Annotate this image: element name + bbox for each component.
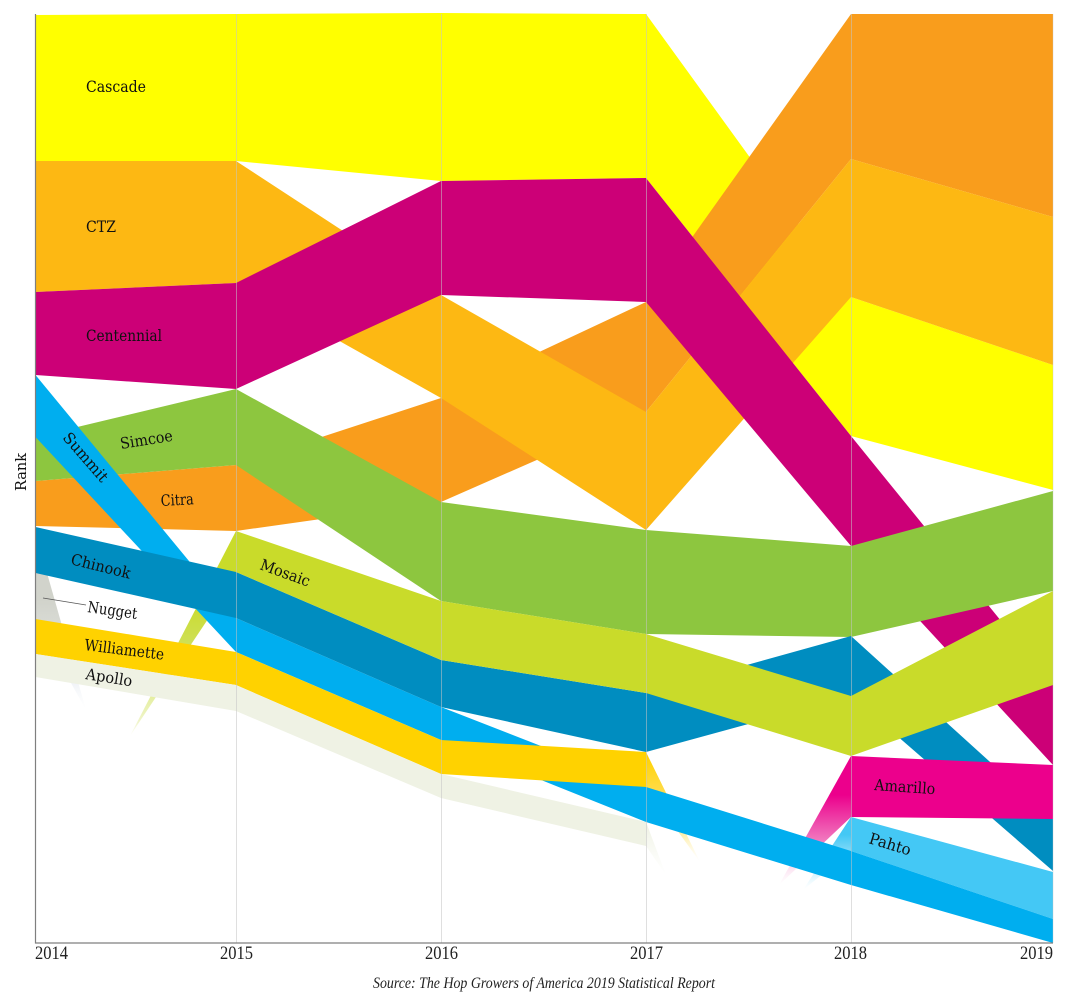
band: Amarillo entry fade bbox=[779, 756, 851, 885]
year labels: 2014 bbox=[35, 944, 68, 964]
band: Apollo bbox=[36, 654, 646, 846]
band: Centennial bbox=[36, 178, 1053, 765]
band: Citra bbox=[36, 14, 1053, 531]
year labels: 2019 bbox=[1020, 944, 1053, 964]
band: Williamette exit fade bbox=[646, 752, 700, 862]
year labels: 2017 bbox=[630, 944, 663, 964]
label: Pahto: Pahto bbox=[867, 830, 913, 859]
band: Mosaic bbox=[236, 531, 1053, 756]
band: Simcoe bbox=[36, 389, 1053, 637]
label: Chinook: Chinook bbox=[69, 550, 133, 583]
year labels: 2016 bbox=[425, 944, 458, 964]
band: Summit bbox=[36, 375, 1053, 943]
band: Williamette bbox=[36, 619, 646, 787]
label: Centennial: Centennial bbox=[86, 327, 162, 345]
band: Chinook bbox=[36, 527, 1053, 871]
label: Apollo: Apollo bbox=[83, 665, 134, 690]
axis title: Rank: Rank bbox=[12, 452, 30, 491]
band: Pahto bbox=[851, 817, 1053, 919]
label: Nugget: Nugget bbox=[86, 598, 139, 623]
source note: Source: The Hop Growers of America 2019 Statistical Report bbox=[373, 975, 715, 992]
band: CTZ bbox=[36, 159, 1053, 530]
label: Mosaic: Mosaic bbox=[258, 556, 313, 591]
label: Amarillo: Amarillo bbox=[873, 776, 936, 798]
band: Pahto entry fade bbox=[803, 817, 851, 890]
label: Summit: Summit bbox=[59, 429, 112, 486]
label: Williamette: Williamette bbox=[84, 636, 165, 664]
band: Mosaic entry fade bbox=[130, 531, 236, 736]
label: Cascade: Cascade bbox=[86, 78, 146, 96]
band: Nugget fade bbox=[36, 573, 86, 710]
band: Cascade bbox=[36, 13, 1053, 490]
label: Citra: Citra bbox=[160, 490, 194, 510]
year labels: 2015 bbox=[220, 944, 253, 964]
year labels: 2018 bbox=[834, 944, 867, 964]
year labels bbox=[35, 944, 1053, 964]
label: Simcoe: Simcoe bbox=[119, 427, 174, 453]
band: Apollo exit fade bbox=[646, 822, 666, 875]
label: CTZ: CTZ bbox=[86, 218, 116, 236]
Nugget leader line bbox=[43, 598, 86, 605]
band: Amarillo bbox=[851, 756, 1053, 819]
